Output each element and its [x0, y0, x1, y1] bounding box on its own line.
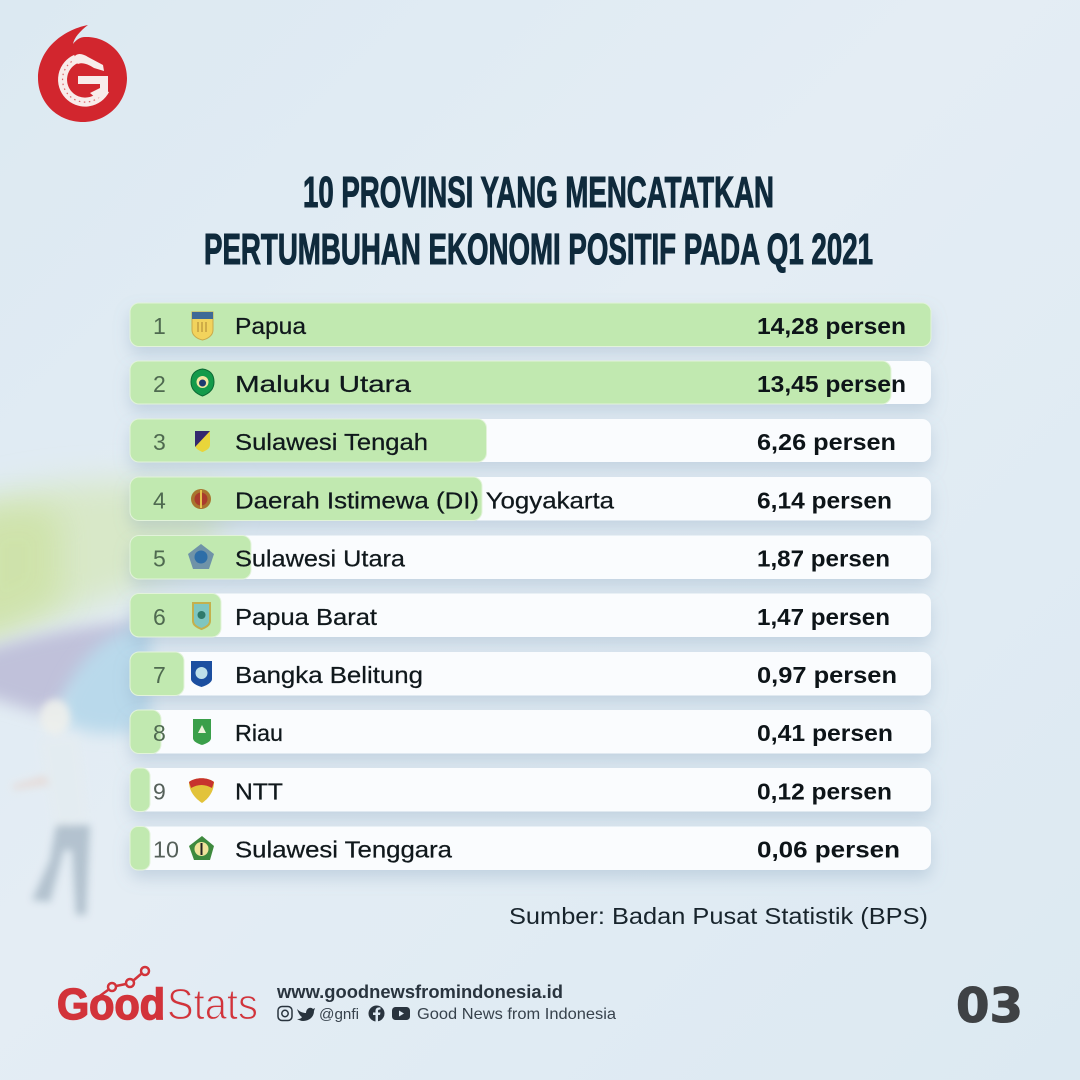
- icon: Sulawesi Utara emblem: [188, 544, 214, 569]
- row 3: Sulawesi Tengah: Sulawesi Tengah: [235, 429, 428, 455]
- website and social handles: [276, 982, 616, 1023]
- row 7: Bangka Belitung: 7: [153, 662, 166, 688]
- icon: Papua emblem: [192, 312, 213, 340]
- logo: GNFI red six mark: [38, 25, 127, 122]
- row 1: Papua: 1: [153, 313, 166, 339]
- page number: 03: [956, 979, 1023, 1034]
- row 9: NTT: NTT: [235, 778, 283, 804]
- row 3: Sulawesi Tengah: 6,26 persen: [757, 429, 896, 455]
- row 7: Bangka Belitung: [130, 652, 931, 696]
- row 4: DI Yogyakarta: 4: [153, 488, 166, 514]
- row 8: Riau: Riau: [235, 720, 283, 746]
- website and social handles: @gnfi: [319, 1006, 359, 1023]
- blurred background illustration: [0, 482, 230, 915]
- icon: Bangka Belitung emblem: [191, 661, 212, 687]
- row 1: Papua: 14,28 persen: [757, 313, 906, 339]
- title: 10 PROVINSI YANG MENCATATKAN: [303, 168, 774, 217]
- icon: twitter: [297, 1008, 315, 1021]
- website and social handles: Good News from Indonesia: [417, 1006, 616, 1023]
- row 8: Riau: [130, 710, 931, 754]
- row 2: Maluku Utara: 13,45 persen: [757, 371, 906, 397]
- logo: GoodStats: Good: [57, 980, 165, 1029]
- logo: white dragon G ring: [63, 54, 108, 102]
- row 8: Riau: 8: [153, 720, 166, 746]
- icon: Papua Barat emblem: [193, 603, 210, 629]
- row 4: DI Yogyakarta: Daerah Istimewa (DI) Yogyakarta: [235, 488, 614, 514]
- icon: Sulawesi Tengah emblem: [195, 431, 210, 452]
- row 6: Papua Barat: 1,47 persen: [757, 604, 890, 630]
- row 10: Sulawesi Tenggara: 10: [153, 836, 179, 862]
- icon: Yogyakarta emblem: [191, 489, 211, 509]
- row 5: Sulawesi Utara: 5: [153, 546, 166, 572]
- row 9: NTT: 0,12 persen: [757, 778, 892, 804]
- row 7: Bangka Belitung: Bangka Belitung: [235, 662, 423, 688]
- row 2: Maluku Utara: [130, 361, 931, 404]
- row 10: Sulawesi Tenggara: Sulawesi Tenggara: [235, 836, 452, 862]
- row 8: Riau: 0,41 persen: [757, 720, 893, 746]
- row 5: Sulawesi Utara: [130, 536, 931, 579]
- row 9: NTT: 9: [153, 778, 166, 804]
- icon: facebook: [368, 1006, 384, 1022]
- row 10: Sulawesi Tenggara: [130, 826, 931, 870]
- icon: instagram: [278, 1006, 292, 1020]
- icon: youtube: [392, 1007, 410, 1020]
- logo: GoodStats: [57, 967, 258, 1029]
- row 10: Sulawesi Tenggara: 0,06 persen: [757, 836, 900, 862]
- icon: Maluku Utara emblem: [191, 369, 214, 396]
- row 2: Maluku Utara: 2: [153, 371, 166, 397]
- row 6: Papua Barat: 6: [153, 604, 166, 630]
- row 3: Sulawesi Tengah: 3: [153, 429, 166, 455]
- ranking panel: ten province bars: [130, 303, 931, 870]
- row 3: Sulawesi Tengah: [130, 419, 931, 462]
- row 1: Papua: Papua: [235, 313, 306, 339]
- blurred person: [12, 699, 90, 915]
- row 4: DI Yogyakarta: 6,14 persen: [757, 488, 892, 514]
- icon: NTT emblem: [189, 778, 214, 803]
- row 5: Sulawesi Utara: 1,87 persen: [757, 546, 890, 572]
- row 4: DI Yogyakarta: [130, 477, 931, 520]
- logo: GoodStats: Stats: [167, 980, 258, 1029]
- row 6: Papua Barat: Papua Barat: [235, 604, 378, 630]
- icon: rising line chart: [97, 967, 149, 998]
- row 2: Maluku Utara: Maluku Utara: [235, 371, 411, 397]
- website and social handles: www.goodnewsfromindonesia.id: [276, 982, 563, 1002]
- icon: Riau emblem: [193, 719, 211, 745]
- row 1: Papua: [130, 303, 931, 346]
- row 5: Sulawesi Utara: Sulawesi Utara: [235, 546, 405, 572]
- icon: Sulawesi Tenggara emblem: [189, 836, 214, 860]
- title: [204, 168, 873, 274]
- row 9: NTT: [130, 768, 931, 812]
- source note: Sumber: Badan Pusat Statistik (BPS): [509, 903, 928, 929]
- row 7: Bangka Belitung: 0,97 persen: [757, 662, 897, 688]
- row 6: Papua Barat: [130, 594, 931, 637]
